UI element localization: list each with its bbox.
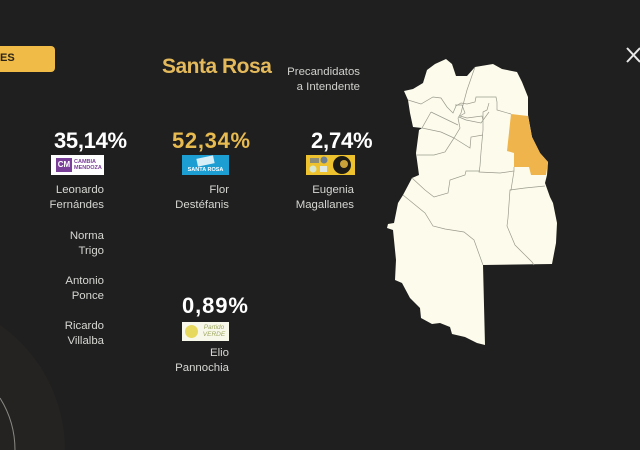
candidate: Ricardo Villalba: Villalba	[67, 335, 104, 347]
name: Fernándes	[50, 199, 104, 211]
percentage: 35,14%	[54, 128, 127, 153]
logo: Santa Rosa	[182, 155, 229, 175]
candidate: Leonardo Fernándes	[50, 128, 127, 211]
tab button: ES	[0, 52, 15, 64]
logo: Partido Verde: Partido	[204, 324, 224, 331]
subtitle: a Intendente	[297, 81, 360, 93]
candidate: Ricardo Villalba	[65, 320, 104, 347]
percentage: 0,89%	[182, 293, 249, 318]
percentage: 2,74%	[311, 128, 372, 153]
candidate: Eugenia Magallanes	[296, 128, 372, 211]
candidate: Antonio Ponce	[65, 275, 104, 302]
candidate: Ricardo Villalba: Ricardo	[65, 320, 104, 332]
logo: Cambia Mendoza: CAMBIA	[74, 159, 96, 165]
map of Mendoza	[387, 59, 557, 345]
name	[175, 347, 229, 374]
logo: Cambia Mendoza: MENDOZA	[74, 165, 102, 171]
logo: Partido Verde	[182, 322, 229, 341]
candidate: Antonio Ponce: Ponce	[72, 290, 104, 302]
province outline	[387, 59, 557, 345]
logo: Partido Verde: VERDE	[203, 330, 225, 338]
name: Magallanes	[296, 199, 354, 211]
logo: coalition	[306, 155, 355, 175]
subtitle	[287, 66, 360, 93]
candidate: Flor Destéfanis	[172, 128, 251, 211]
logo: Cambia Mendoza: CM	[58, 160, 70, 169]
name: Elio	[210, 347, 229, 359]
close icon	[626, 47, 640, 63]
name	[296, 184, 354, 211]
department borders	[403, 67, 545, 265]
name: Pannochia	[175, 362, 229, 374]
name	[50, 184, 104, 211]
name: Destéfanis	[175, 199, 229, 211]
logo: Santa Rosa: SANTA ROSA	[188, 167, 223, 173]
highlighted department: Santa Rosa	[507, 114, 548, 175]
logo: Cambia Mendoza	[51, 155, 104, 175]
percentage: 52,34%	[172, 128, 251, 153]
candidate: Elio Pannochia	[175, 293, 249, 374]
title: Santa Rosa	[162, 55, 271, 78]
decorative circle bottom left	[0, 398, 16, 450]
candidate: Norma Trigo	[70, 230, 104, 257]
name: Flor	[209, 184, 229, 196]
candidate: Antonio Ponce: Antonio	[65, 275, 104, 287]
name: Eugenia	[312, 184, 354, 196]
name: Leonardo	[56, 184, 104, 196]
name	[175, 184, 229, 211]
candidate: Norma Trigo: Trigo	[78, 245, 104, 257]
candidate: Norma Trigo: Norma	[70, 230, 104, 242]
subtitle: Precandidatos	[287, 66, 360, 78]
tab button	[0, 46, 55, 72]
